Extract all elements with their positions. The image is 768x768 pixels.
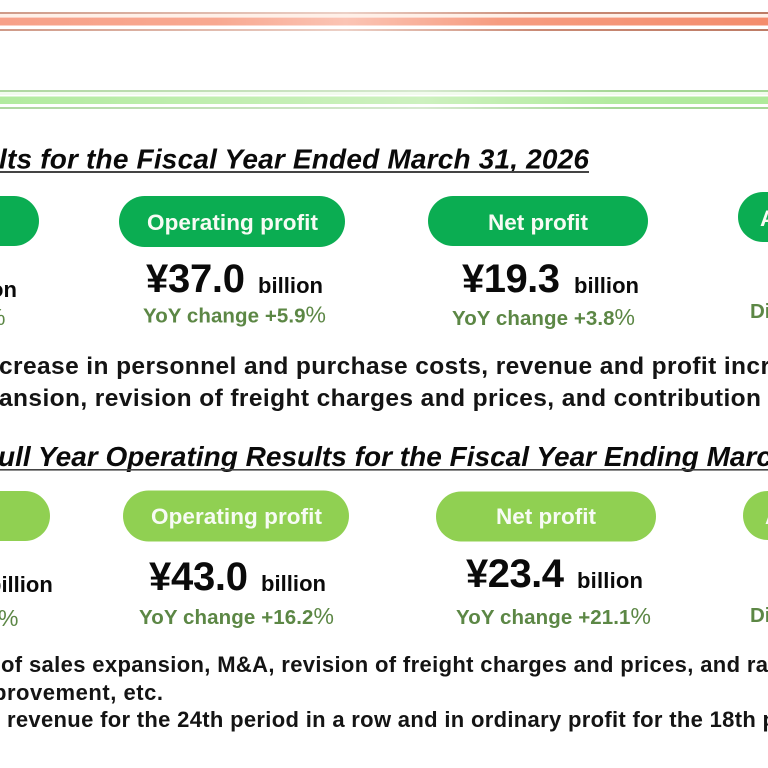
commentary text <box>0 353 768 412</box>
heading: results: lts for the Fiscal Year Ended March 31, 2026 <box>0 144 589 174</box>
metric: operating profit forecast: YoY change +16.2% <box>139 603 334 629</box>
metric: net profit forecast <box>436 492 656 629</box>
metric: net profit forecast: billion <box>577 568 643 593</box>
metric: revenue forecast (cropped) <box>0 491 53 631</box>
section: results for the fiscal year ended March 31, 2026 <box>0 144 768 412</box>
metric: operating profit: Operating profit <box>147 210 318 235</box>
metric: operating profit <box>119 196 345 328</box>
commentary text: of sales expansion, M&A, revision of freight charges and prices, and ra <box>1 652 768 677</box>
section: full year forecast for the fiscal year ending March <box>0 441 768 732</box>
metric: operating profit: billion <box>258 273 323 298</box>
metric: net profit: ¥19.3 <box>462 257 560 301</box>
metric: net profit forecast: ¥23.4 <box>466 552 565 596</box>
commentary text: revenue for the 24th period in a row and in ordinary profit for the 18th p <box>7 707 768 732</box>
commentary text <box>0 652 768 732</box>
decorative header band: salmon <box>0 12 768 31</box>
metric: operating profit forecast: billion <box>261 571 326 596</box>
metric: net profit: billion <box>574 273 639 298</box>
metric: net profit <box>428 196 648 330</box>
metric: operating profit forecast <box>123 490 349 629</box>
metric: fourth metric (cropped) <box>738 192 768 323</box>
metric: operating profit: ¥37.0 <box>146 257 245 301</box>
metric: net profit: YoY change +3.8% <box>452 304 635 330</box>
metric: operating profit forecast: Operating profit <box>151 504 322 529</box>
decorative header band: green <box>0 90 768 109</box>
metric: fourth metric forecast (cropped) <box>743 491 768 627</box>
heading: forecast: ull Year Operating Results for the Fiscal Year Ending Marc <box>0 441 768 472</box>
metric: revenue (cropped) <box>0 196 39 330</box>
metric: net profit forecast: YoY change +21.1% <box>456 603 651 629</box>
metric: net profit: Net profit <box>488 210 588 235</box>
metric: net profit forecast: Net profit <box>496 504 596 529</box>
metric: operating profit: YoY change +5.9% <box>143 302 326 328</box>
commentary text: ansion, revision of freight charges and prices, and contribution <box>0 385 761 412</box>
metric: operating profit forecast: ¥43.0 <box>149 555 248 599</box>
commentary text: crease in personnel and purchase costs, revenue and profit incr <box>0 353 768 380</box>
